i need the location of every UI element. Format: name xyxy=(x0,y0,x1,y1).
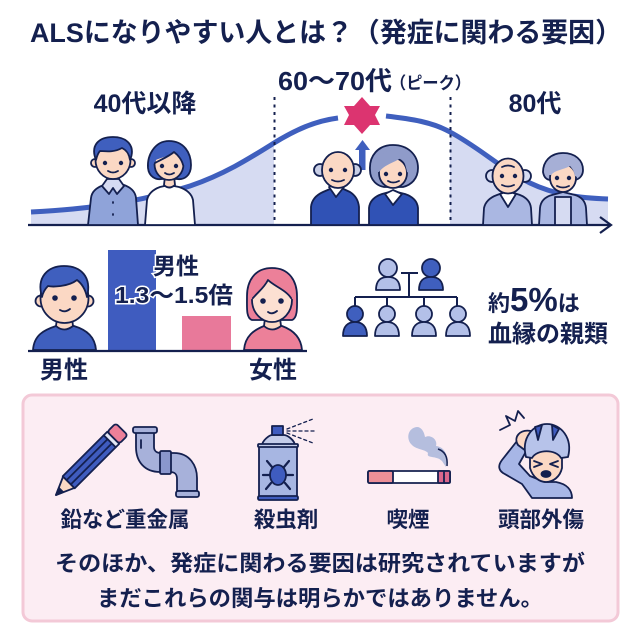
person: elderly woman 60s xyxy=(369,145,418,225)
dotted dividers xyxy=(274,97,450,222)
bar: female xyxy=(182,316,231,351)
person: man 40s xyxy=(88,137,138,225)
curve right xyxy=(386,116,608,199)
person: woman 40s xyxy=(145,141,195,225)
text: note: そのほか、発症に関わる要因は研究されていますが xyxy=(55,551,585,576)
title: ALSになりやすい人とは？（発症に関わる要因） xyxy=(30,18,622,48)
icon: up arrow xyxy=(355,140,370,170)
child 1 xyxy=(343,306,367,336)
child 3 xyxy=(412,306,436,336)
icon: pipe xyxy=(133,427,199,497)
text: note xyxy=(55,551,585,611)
area: over 70 shading xyxy=(450,132,608,225)
icon: family tree xyxy=(343,259,470,336)
icon: pencil xyxy=(50,423,128,501)
label: 80s: 80代 xyxy=(509,90,561,118)
person: woman 80s xyxy=(539,153,587,225)
icon: smoke xyxy=(408,427,447,467)
person: boy xyxy=(33,266,96,350)
label: male: 男性 xyxy=(40,357,88,384)
icon: head injury xyxy=(499,411,572,498)
label: lead: 鉛など重金属 xyxy=(60,508,190,532)
person: man 80s xyxy=(483,158,532,225)
icon: insecticide spray xyxy=(258,419,314,500)
parent 2 xyxy=(419,259,443,290)
icon: cigarette xyxy=(368,471,450,483)
chart: age incidence curve xyxy=(28,97,611,233)
person: elderly man 60s xyxy=(311,152,361,225)
text: 5% relatives xyxy=(488,281,608,348)
tree lines xyxy=(355,273,457,306)
axis arrow xyxy=(28,217,611,233)
label: female: 女性 xyxy=(249,357,297,384)
bar: male xyxy=(108,250,156,351)
icon: peak star xyxy=(344,97,380,134)
baseline xyxy=(28,350,307,352)
callout: ratio: 男性 xyxy=(153,253,199,279)
callout: ratio xyxy=(115,253,233,308)
label: 60-70s peak xyxy=(278,66,471,96)
callout: ratio: 1.3〜1.5倍 xyxy=(115,282,233,308)
label: smoking: 喫煙 xyxy=(386,508,430,532)
curve xyxy=(31,118,338,212)
child 4 xyxy=(446,306,470,336)
text: note: まだこれらの関与は明らかではありません。 xyxy=(97,586,543,611)
text: 5% relatives: 血縁の親類 xyxy=(488,321,608,348)
label: 40s: 40代以降 xyxy=(94,90,196,118)
label: head trauma: 頭部外傷 xyxy=(498,508,584,532)
person: girl xyxy=(244,268,302,350)
chart: sex ratio bars xyxy=(28,250,307,351)
text: 5% relatives: 約5%は xyxy=(488,281,580,318)
label: 60-70s peak: 60〜70代 xyxy=(278,66,392,96)
parent 1 xyxy=(376,259,400,290)
child 2 xyxy=(375,306,399,336)
panel: other factors xyxy=(23,395,618,621)
label: 60-70s peak: （ピーク） xyxy=(390,74,471,93)
area: under 60 shading xyxy=(31,145,274,225)
label: pesticide: 殺虫剤 xyxy=(254,508,318,532)
